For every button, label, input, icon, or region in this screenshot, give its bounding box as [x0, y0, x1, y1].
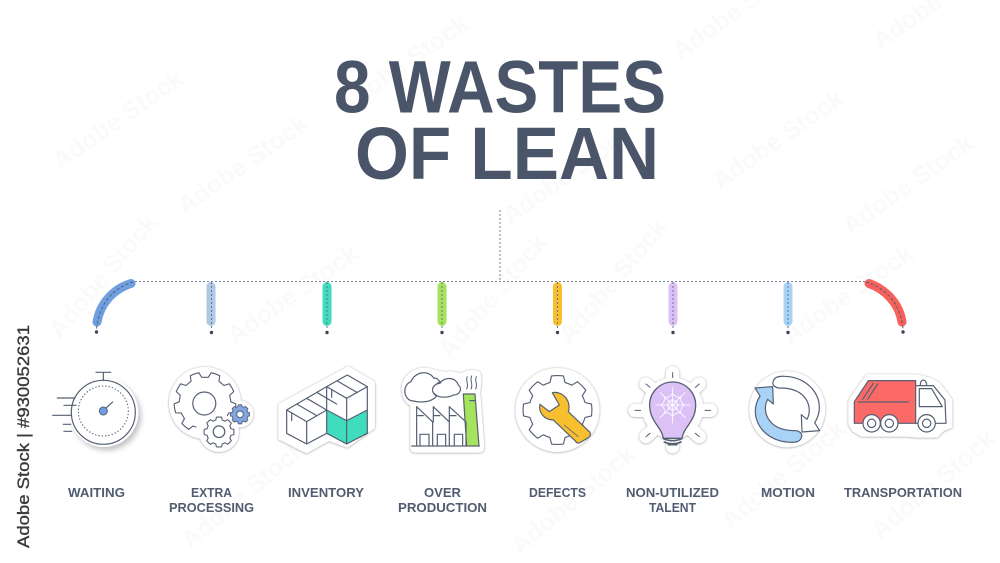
- icon: motion arrows: [749, 371, 825, 447]
- branch: transportation: [866, 282, 905, 334]
- label: extra processing: EXTRA: [191, 486, 232, 500]
- watermark: Adobe Stock: [172, 109, 314, 220]
- watermark: Adobe Stock: [553, 214, 673, 349]
- icon: light bulb: [635, 373, 711, 447]
- watermark: Adobe Stock: [866, 425, 1000, 545]
- branch: non-utilized talent: [668, 282, 678, 334]
- branch: defects: [553, 282, 562, 334]
- label: non-utilized talent: TALENT: [649, 501, 696, 515]
- icon: gears: [169, 367, 254, 452]
- watermark: Adobe Stock: [716, 415, 851, 535]
- label: extra processing: [169, 486, 254, 515]
- label: over production: OVER: [424, 486, 461, 500]
- watermark: Adobe Stock: [506, 440, 641, 560]
- icon: stopwatch: [53, 372, 138, 447]
- title: OF LEAN: [355, 112, 659, 195]
- title: 8 WASTES: [334, 46, 666, 128]
- stock image credit: Adobe Stock | #930052631: [14, 325, 33, 548]
- label: non-utilized talent: [626, 486, 719, 515]
- branch: over production: [438, 282, 446, 334]
- branch: waiting: [95, 282, 133, 334]
- branch: extra processing: [206, 282, 216, 334]
- watermark: Adobe Stock: [176, 435, 311, 555]
- watermark: Adobe Stock: [332, 9, 474, 120]
- watermark: Adobe Stock: [433, 229, 553, 364]
- label: transportation: TRANSPORTATION: [844, 486, 962, 500]
- label: over production: [398, 486, 487, 515]
- watermark: Adobe Stock: [222, 239, 364, 350]
- branch: inventory: [322, 282, 332, 334]
- label: motion: MOTION: [761, 486, 815, 500]
- icon: factory: [403, 369, 483, 452]
- branch: motion: [784, 282, 792, 334]
- label: over production: PRODUCTION: [398, 501, 487, 515]
- label: extra processing: PROCESSING: [169, 501, 254, 515]
- label: inventory: INVENTORY: [288, 486, 365, 500]
- watermark: Adobe Stock: [497, 119, 639, 230]
- icon: wrench in gear: [516, 368, 600, 452]
- watermark: Adobe Stock: [837, 129, 979, 240]
- connector tree: [135, 210, 866, 282]
- icon: inventory boxes: [280, 368, 373, 452]
- watermark: Adobe Stock: [707, 84, 849, 195]
- label: non-utilized talent: NON-UTILIZED: [626, 486, 719, 500]
- label: waiting: WAITING: [68, 486, 125, 500]
- label: defects: DEFECTS: [529, 486, 586, 500]
- watermark: Adobe Stock: [47, 64, 189, 175]
- title: [334, 46, 666, 195]
- watermark: Adobe Stock: [43, 209, 163, 344]
- watermark: Adobe Stock: [777, 239, 919, 350]
- icon: truck: [850, 376, 951, 436]
